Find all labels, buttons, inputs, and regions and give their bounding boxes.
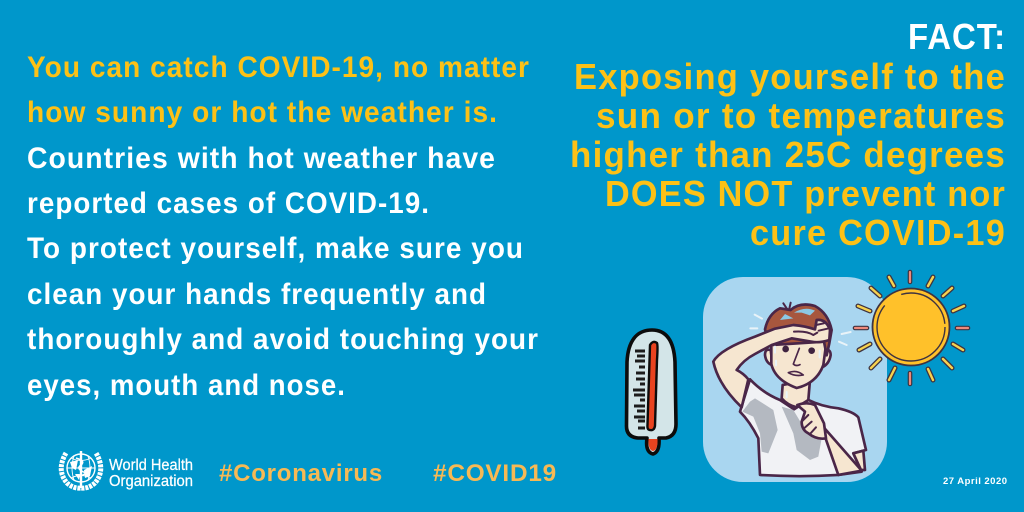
heading: fact statement: cure COVID-19 [750, 212, 1006, 253]
man: fingers at collar [802, 415, 816, 434]
man: ears [765, 350, 831, 367]
text block: white protective advice [27, 142, 539, 402]
man: sweat drops and heat marks [750, 315, 851, 397]
sun rays: pink [855, 272, 968, 384]
panel: light blue illustration background [703, 277, 887, 482]
man: t-shirt [740, 379, 866, 476]
text block: white protective advice: To protect yourself, make sure you [27, 232, 524, 265]
text block: white protective advice: reported cases of COVID-19. [27, 187, 430, 220]
logo: World Health Organization wordmark [109, 457, 193, 490]
heading: fact statement: DOES NOT prevent nor [605, 173, 1006, 214]
illustration: sweating man shading his eyes [713, 303, 866, 476]
text block: yellow key message [27, 51, 530, 129]
man: hair [765, 305, 832, 355]
man: neck [782, 380, 810, 407]
heading: fact statement: higher than 25C degrees [570, 134, 1006, 175]
heading: FACT: FACT: [908, 16, 1006, 57]
hashtag: Coronavirus: #Coronavirus [219, 460, 383, 487]
text block: yellow key message: how sunny or hot the weather is. [27, 96, 498, 129]
heading: fact statement: sun or to temperatures [596, 95, 1006, 136]
text block: yellow key message: You can catch COVID-19, no matter [27, 51, 530, 84]
man: forearm [822, 425, 865, 475]
logo: World Health Organization wordmark: Organization [109, 473, 193, 490]
man: head [771, 338, 827, 388]
text block: white protective advice: Countries with hot weather have [27, 142, 496, 175]
icon: thermometer [626, 330, 676, 454]
heading: fact statement [570, 56, 1006, 253]
man: arm and finger creases [794, 323, 827, 335]
text block: white protective advice: eyes, mouth and nose. [27, 369, 346, 402]
date: 27 April 2020 [943, 476, 1007, 487]
sun rays: yellow [858, 277, 964, 380]
text block: white protective advice: clean your hands frequently and [27, 278, 487, 311]
man: hand at collar [797, 403, 826, 439]
logo: WHO emblem [61, 451, 101, 488]
man: hair highlight [780, 309, 815, 320]
hashtag: COVID19: #COVID19 [433, 460, 557, 487]
man: hair tuft [783, 303, 791, 309]
text block: white protective advice: thoroughly and avoid touching your [27, 323, 539, 356]
man: face features [788, 348, 803, 375]
logo: World Health Organization wordmark: World Health [109, 457, 193, 474]
heading: fact statement: Exposing yourself to the [574, 56, 1006, 97]
man: sweat patches [742, 398, 822, 460]
man: raised arm [713, 320, 830, 407]
icon: sun [855, 272, 968, 384]
